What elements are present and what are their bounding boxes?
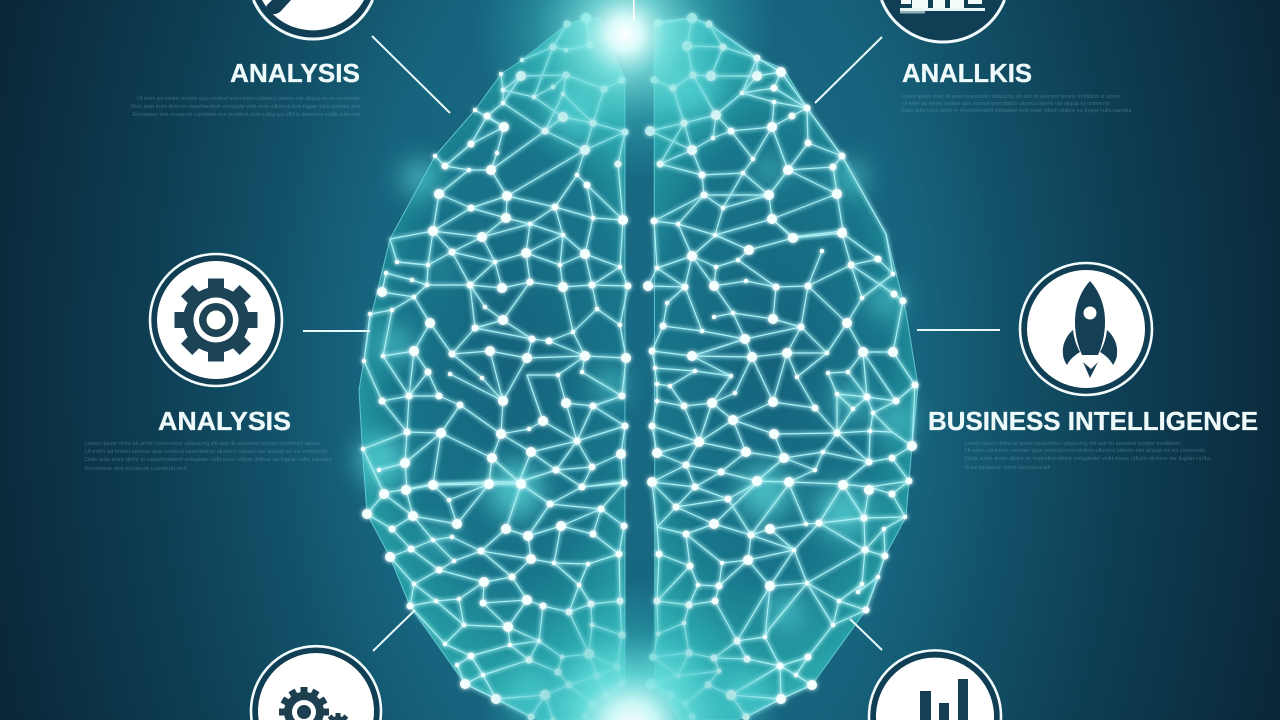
icon: bar chart, top right <box>882 0 1004 42</box>
heading: analysis top left: ANALYSIS <box>230 58 360 88</box>
text block: middle right description: Lorem ipsum dolor sit amet consectetur adipiscing elit sed do eiusmod tempor incididunt <box>965 441 1181 447</box>
text block: top left description: Duis aute irure dolor in reprehenderit voluptate velit esse cillum dolore fugiat nulla pariatur sint <box>131 104 361 110</box>
connector line: top right <box>815 37 882 103</box>
right hemisphere <box>644 18 918 720</box>
connector line: top left <box>372 36 450 113</box>
panel: brain network <box>358 0 918 720</box>
text block: middle right description: Ut enim ad minim veniam quis nostrud exercitation ullamco laboris nisi aliquip ex ea commodo <box>965 448 1205 454</box>
icon: gear, middle left <box>150 254 282 386</box>
connector line: bottom left <box>373 610 415 651</box>
connector line: bottom right <box>850 619 882 650</box>
text block: top right description: Lorem ipsum dolor sit amet consectetur adipiscing elit sed do eiusmod tempor incididunt ut labore <box>902 94 1120 100</box>
text block: top left description: Ut enim ad minim veniam quis nostrud exercitation ullamco laboris nisi aliquip ex ea commodo <box>137 96 360 102</box>
heading: analysis middle left: ANALYSIS <box>158 406 291 436</box>
text block: middle left description <box>85 441 332 472</box>
top light beam <box>475 0 775 184</box>
text block: top right description: Ut enim ad minim veniam quis nostrud exercitation ullamco laboris nisi aliquip ex commodo <box>902 101 1110 107</box>
text block: top right description: Duis aute irure dolor in reprehenderit voluptate velit esse cillum dolore eu fugiat nulla pariatur <box>902 108 1132 114</box>
text block: top right description <box>902 94 1132 114</box>
text block: middle right description: Duis aute irure dolor in reprehenderit voluptate velit esse cillum dolore eu fugiat nulla <box>965 456 1210 462</box>
left hemisphere <box>358 18 628 720</box>
bottom light beam <box>482 578 782 720</box>
text block: middle right description <box>965 441 1210 471</box>
icon: magnifier, top left <box>253 0 373 39</box>
connector line: middle right <box>917 329 1000 331</box>
text block: top left description: Excepteur sint occaecat cupidatat non proident sunt culpa qui officia deserunt mollit anim est <box>133 112 361 118</box>
text block: middle left description: Ut enim ad minim veniam quis nostrud exercitation ullamco laboris nisi aliquip ex ea commodo <box>85 449 327 455</box>
heading: business intelligence: BUSINESS INTELLIGENCE <box>928 406 1258 436</box>
text block: middle left description: Duis aute irure dolor in reprehenderit voluptate velit esse cillum dolore eu fugiat nulla pariatur <box>85 457 332 463</box>
text block: middle left description: Excepteur sint occaecat cupidatat non <box>85 466 187 472</box>
text block: middle left description: Lorem ipsum dolor sit amet consectetur adipiscing elit sed do eiusmod tempor incididunt labore <box>85 441 320 447</box>
text block: top left description <box>131 96 361 118</box>
text block: middle right description: Excepteur sint occaecat <box>965 465 1051 471</box>
icon: bar chart, bottom right <box>869 650 1001 720</box>
icon: gears, bottom left <box>251 646 381 720</box>
icon: rocket, middle right <box>1020 263 1152 395</box>
heading: analksis top right: ANALLKIS <box>902 58 1032 88</box>
connector line: middle left <box>303 330 370 332</box>
